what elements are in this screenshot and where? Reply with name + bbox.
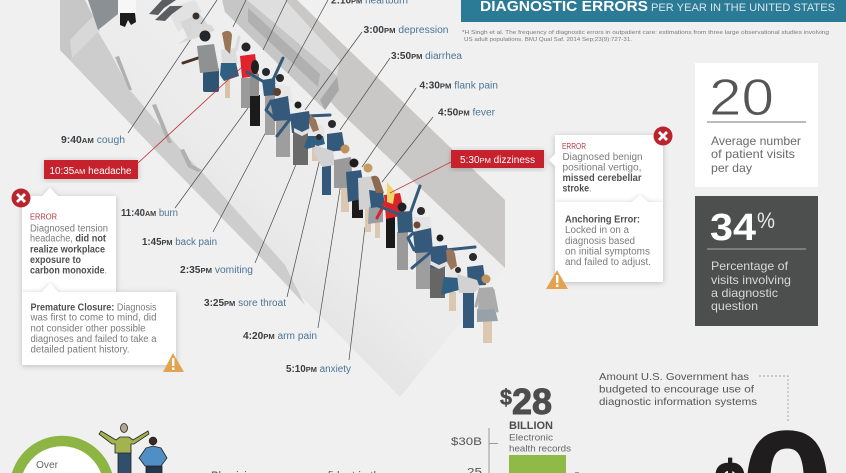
time label: 1:45pm back pain: 1:45PM back pain <box>142 237 217 248</box>
stat panel: 20 visits per day: Average number <box>711 134 801 148</box>
person 23 <box>455 267 480 328</box>
footnote citation: *H Singh et al. The frequency of diagnostic errors in outpatient care: estimations from three large observational studies involving <box>462 30 829 36</box>
footnote citation: US adult populations. BMJ Qual Saf. 2014 Sep;23(9):727-31. <box>464 37 632 43</box>
person 8 <box>277 102 330 165</box>
bar chart: federal spending: $ <box>500 385 512 410</box>
person 12 <box>334 144 353 212</box>
person 18 <box>414 207 433 240</box>
stat panel: 20 visits per day: of patient visits <box>711 147 795 161</box>
panel: headache error callout <box>22 188 176 365</box>
leader lines <box>128 0 433 360</box>
icon: man with raised arms <box>99 424 149 473</box>
time label: 4:20pm arm pain: 4:20PM arm pain <box>243 331 317 342</box>
panel: dizziness error callout: missed cerebellar <box>562 173 642 184</box>
time label: 3:00pm depression: 3:00PM depression <box>364 25 449 36</box>
time label: 2:35pm vomiting: 2:35PM vomiting <box>180 265 253 276</box>
bar chart: federal spending <box>451 381 579 473</box>
stat panel: 34 percent diagnostic visits: 34 <box>710 207 756 249</box>
person 24 <box>476 274 498 343</box>
premature closure card: not consider other possible <box>30 324 146 334</box>
person 3 red shirt <box>240 42 258 108</box>
stat panel: 34 percent diagnostic visits: visits involving <box>711 273 791 287</box>
person 2 <box>220 31 239 98</box>
anchoring error card <box>555 195 663 282</box>
anchoring error card: on initial symptoms <box>565 246 650 258</box>
icon: error x badge right <box>654 126 672 146</box>
stat panel: 20 visits per day: per day <box>711 161 752 175</box>
premature closure card <box>22 283 176 365</box>
illustration: clinic floor and walls <box>60 0 505 397</box>
stat panel: 34 percent diagnostic visits: question <box>711 299 758 313</box>
person 22 <box>467 253 486 286</box>
time label: 5:30pm dizziness highlighted <box>451 150 544 168</box>
time label: 3:50pm diarrhea: 3:50PM diarrhea <box>391 51 462 62</box>
person 7 <box>266 88 291 157</box>
time label: 3:25pm sore throat: 3:25PM sore throat <box>204 298 286 309</box>
person 9 <box>304 114 326 161</box>
person 19 <box>408 222 433 289</box>
text block: government budget note: budgeted to encourage use of <box>599 384 754 396</box>
panel: headache error callout: Diagnosed tension <box>30 224 108 234</box>
stat panel: 34 percent diagnostic visits: Percentage of <box>711 259 789 273</box>
premature closure card: Premature Closure: Diagnosis <box>30 302 157 314</box>
time label: 9:40am cough: 9:40AM cough <box>61 135 125 146</box>
person 16 red blonde patient <box>377 182 405 248</box>
person 5 arm raised <box>247 58 283 135</box>
panel: dizziness error callout <box>549 135 663 282</box>
time label: 5:10pm anxiety: 5:10PM anxiety <box>286 364 351 375</box>
stat panel: 34 percent diagnostic visits: % <box>757 208 775 233</box>
stat panel: 20 visits per day: 20 <box>709 69 774 127</box>
icon: warning triangle left <box>163 353 184 372</box>
person 4 <box>250 60 260 126</box>
panel: headache error callout: realize workplace <box>30 244 106 256</box>
anchoring error card: Anchoring Error: <box>565 214 640 226</box>
stat panel: 20 visits per day <box>695 63 818 187</box>
green ring statistic: Over <box>36 460 59 471</box>
stat panel: 34 percent diagnostic visits <box>695 196 818 326</box>
red leader lines <box>138 67 451 193</box>
person 17 <box>376 186 420 270</box>
anchoring error card: diagnosis based <box>565 236 635 247</box>
header banner: PER YEAR IN THE UNITED STATES <box>651 2 835 14</box>
panel: dizziness error callout: positional vertigo, <box>562 162 642 174</box>
panel: dizziness error callout: ERROR <box>562 142 586 151</box>
premature closure card: diagnoses and failed to take a <box>30 334 157 345</box>
time label: 5:30pm dizziness highlighted: 5:30PM dizziness <box>460 155 535 166</box>
text block: government budget note: Amount U.S. Government has <box>599 371 749 383</box>
panel: dizziness error callout: Diagnosed benign <box>562 152 642 163</box>
footnote citation <box>462 30 829 43</box>
person 6 <box>275 74 293 104</box>
person 10 <box>327 120 345 152</box>
text block: government budget note: diagnostic information systems <box>599 396 757 408</box>
panel: headache error callout: headache, did not <box>30 234 107 244</box>
bar chart: federal spending: 28 <box>512 381 552 422</box>
bar chart: federal spending: Electronic <box>509 432 553 444</box>
icon: error x badge left <box>12 188 30 208</box>
bar chart: federal spending: $30B <box>451 436 482 448</box>
crowd of patients in line <box>183 30 498 343</box>
panel: dizziness error callout: stroke. <box>562 184 592 194</box>
anchoring error card: Locked in on a <box>565 225 630 236</box>
person 21 <box>441 249 462 311</box>
bar chart: federal spending: health records <box>509 444 571 454</box>
person 14 <box>358 164 377 232</box>
time label: 4:30pm flank pain: 4:30PM flank pain <box>420 80 498 92</box>
icon: warning triangle right <box>546 270 568 289</box>
time label: 4:50pm fever: 4:50PM fever <box>438 108 496 118</box>
time label: 10:35am headache highlighted <box>44 160 138 179</box>
person 13 <box>346 158 366 218</box>
icon: man with hands on hips <box>139 437 167 473</box>
green ring statistic <box>15 441 109 473</box>
person 1 <box>183 30 219 92</box>
text block: government budget note <box>599 371 788 422</box>
person 15 <box>368 176 385 238</box>
panel: headache error callout: exposure to <box>30 255 81 266</box>
panel: headache error callout: carbon monoxide. <box>30 266 107 276</box>
time label: 11:40am burn: 11:40AM burn <box>121 208 178 219</box>
waiting room figures at top <box>118 0 215 44</box>
anchoring error card: and failed to adjust. <box>565 257 651 268</box>
person 11 <box>314 134 335 195</box>
premature closure card: detailed patient history. <box>30 344 130 356</box>
bar chart: federal spending: BILLION <box>509 420 553 432</box>
time label: 10:35am headache highlighted: 10:35AM headache <box>50 166 132 177</box>
header banner <box>461 0 846 22</box>
person 20 <box>412 234 475 298</box>
premature closure card: was first to come to mind, did <box>30 312 156 324</box>
panel: headache error callout: ERROR <box>30 212 57 222</box>
stat panel: 34 percent diagnostic visits: a diagnostic <box>711 286 778 300</box>
